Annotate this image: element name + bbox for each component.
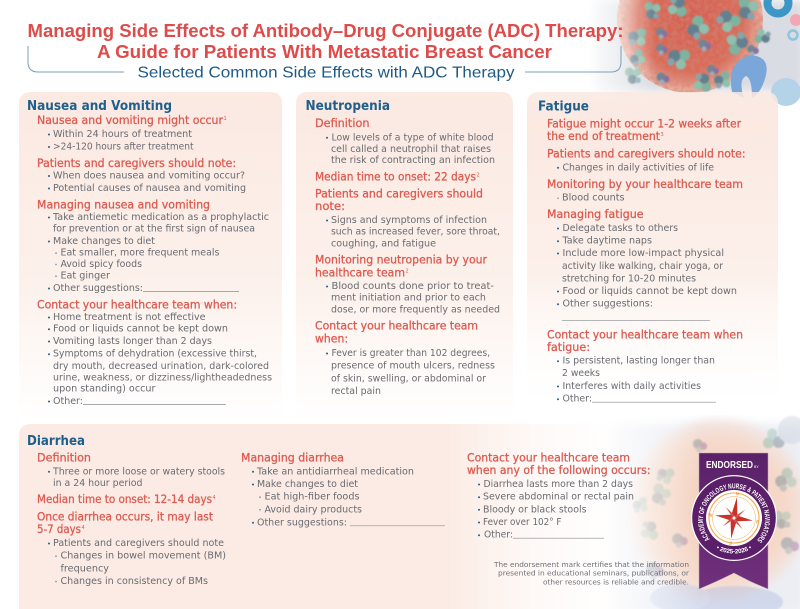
section: patients and caregivers: Patients and caregivers should [315, 188, 483, 201]
column: managing diarrhea: Take an antidiarrheal medication [256, 466, 414, 477]
subtitle with bracket: Selected Common Side Effects with ADC Therapy [138, 64, 515, 82]
section: might occur [547, 117, 741, 143]
section: patients and caregivers: Changes in daily activities of life [562, 162, 714, 173]
column: definition and duration: Definition [37, 451, 91, 464]
column: definition and duration: 5-7 days [37, 523, 81, 536]
badge: endorsed ribbon [691, 452, 777, 590]
heading: nausea and vomiting: Nausea and Vomiting [27, 98, 172, 114]
section: managing nausea: Other suggestions: [53, 283, 143, 294]
section: contact healthcare team: Symptoms of dehydration (excessive thirst, [53, 349, 257, 360]
endorsement note [493, 561, 689, 586]
section: managing nausea: Managing nausea and vomiting [37, 199, 210, 212]
section: contact healthcare team: Other: [53, 396, 83, 407]
section: managing fatigue: stretching for 10-20 minutes [562, 273, 696, 284]
median time to onset: 2 [476, 172, 480, 178]
badge: endorsed ribbon: ACADEMY OF ONCOLOGY NURSE & PATIENT NAVIGATORS [698, 483, 770, 543]
section: managing fatigue [547, 208, 737, 321]
endorsement note: The endorsement mark certifies that the information [493, 561, 689, 569]
section: contact healthcare team: Interferes with daily activities [562, 381, 701, 392]
icon: compass star [704, 488, 763, 549]
section: managing nausea: Eat ginger [60, 271, 111, 282]
icon: compass star: W [708, 512, 713, 518]
column: definition and duration [37, 451, 226, 587]
column: managing diarrhea [241, 451, 445, 528]
section: contact healthcare team: Is persistent, lasting longer than [562, 356, 715, 367]
column: contact healthcare team: Diarrhea lasts more than 2 days [484, 479, 633, 490]
section: contact healthcare team: urine, weakness, or dizziness/lightheadedness [53, 373, 272, 384]
background image: virus top right [590, 0, 800, 106]
section: patients and caregivers: When does nausea and vomiting occur? [53, 170, 245, 182]
section: contact healthcare team: fatigue: [547, 341, 590, 354]
column: definition and duration: Median time to onset: 12-14 days [37, 493, 212, 506]
column: managing diarrhea: Avoid dairy products [264, 504, 362, 515]
section: managing nausea [37, 199, 269, 294]
column: contact healthcare team: Other: [484, 530, 513, 541]
section: patients and caregivers: note: [315, 200, 345, 213]
title: A Guide for Patients With Metastatic Breast Cancer [97, 41, 552, 62]
section: managing fatigue: Managing fatigue [547, 208, 644, 221]
column: definition and duration: Once diarrhea occurs, it may last [37, 510, 214, 523]
section: contact healthcare team: Fever is greater than 102 degrees, [332, 348, 490, 359]
section: monitoring neutropenia: Monitoring neutropenia by your [315, 254, 487, 267]
section: monitoring neutropenia: Blood counts done prior to treat- [332, 281, 494, 292]
section: patients and caregivers [315, 188, 500, 249]
panel: neutropenia [296, 92, 513, 420]
column: contact healthcare team: Severe abdominal or rectal pain [483, 492, 634, 503]
section: definition: cell called a neutrophil that raises [331, 144, 491, 155]
heading: fatigue: Fatigue [538, 99, 589, 115]
median time to onset: Median time to onset: 22 days [315, 170, 476, 183]
section: managing nausea: Take antiemetic medication as a prophylactic [52, 212, 269, 223]
column: definition and duration: 4 [212, 495, 216, 501]
section: managing nausea: Avoid spicy foods [60, 259, 142, 270]
section: patients and caregivers: Signs and symptoms of infection [331, 215, 487, 226]
section: monitoring neutropenia: healthcare team [315, 266, 405, 279]
heading: diarrhea: Diarrhea [27, 433, 85, 449]
section: contact healthcare team: Contact your healthcare team when: [37, 299, 237, 312]
column: contact healthcare team: Bloody or black stools [483, 504, 586, 515]
title [28, 20, 624, 62]
section: patients and caregivers: coughing, and fatigue [331, 238, 436, 249]
section: might occur: 3 [660, 132, 664, 138]
column: contact healthcare team: when any of the following occurs: [467, 464, 650, 477]
section: managing nausea: Eat smaller, more frequent meals [60, 248, 220, 259]
column: managing diarrhea: Other suggestions: [257, 517, 347, 528]
section: definition: Definition [315, 117, 370, 130]
section: monitoring neutropenia [315, 254, 500, 315]
column: definition and duration: Changes in bowel movement (BM) [60, 551, 226, 562]
column: contact healthcare team [467, 451, 650, 541]
section: might occur [37, 114, 227, 153]
section: contact healthcare team: presence of mouth ulcers, redness [331, 361, 495, 372]
endorsement note: other resources is reliable and credible. [543, 578, 689, 586]
subtitle with bracket [28, 46, 621, 82]
endorsement note: presented in educational seminars, publications, or [498, 570, 689, 578]
section: patients and caregivers: such as increased fever, sore throat, [331, 227, 500, 238]
section: might occur: Within 24 hours of treatment [53, 129, 192, 140]
section: might occur: the end of treatment [547, 130, 661, 143]
badge: endorsed ribbon: BY [754, 465, 759, 469]
heading: neutropenia: Neutropenia [306, 98, 390, 114]
background image: faded virus bottom right [610, 416, 800, 609]
section: monitoring neutropenia: ment initiation and prior to each [331, 293, 486, 304]
section: contact healthcare team: Vomiting lasts longer than 2 days [53, 336, 212, 347]
column: managing diarrhea: Eat high-fiber foods [264, 492, 360, 503]
column: contact healthcare team: Fever over 102° F [483, 517, 562, 528]
section: contact healthcare team: Home treatment is not effective [53, 312, 206, 323]
icon: compass star: N [735, 491, 739, 496]
section: patients and caregivers: Potential causes of nausea and vomiting [53, 183, 246, 194]
column: definition and duration: Three or more loose or watery stools [52, 466, 225, 477]
column: definition and duration: frequency [60, 563, 109, 574]
section: managing fatigue: Delegate tasks to others [562, 223, 678, 234]
badge: endorsed ribbon: • 2025-2026 • [717, 546, 751, 554]
badge: endorsed ribbon: ENDORSED [706, 459, 753, 471]
section: patients and caregivers: Patients and caregivers should note: [37, 157, 236, 170]
section: contact healthcare team [315, 319, 495, 397]
section: contact healthcare team: 2 weeks [562, 368, 600, 379]
section: monitoring: Monitoring by your healthcare team [547, 178, 743, 191]
section: managing fatigue: Include more low-impact physical [562, 248, 724, 259]
section: might occur: 1 [224, 116, 227, 122]
section: monitoring: Blood counts [562, 193, 624, 204]
column: managing diarrhea: Managing diarrhea [241, 451, 344, 464]
section: managing fatigue: activity like walking, chair yoga, or [562, 261, 724, 272]
section: patients and caregivers [547, 147, 746, 173]
section: monitoring neutropenia: dose, or more frequently as needed [331, 304, 500, 315]
panel: fatigue [527, 92, 778, 420]
section: contact healthcare team: dry mouth, decreased urination, dark-colored [53, 361, 269, 372]
column: managing diarrhea: Make changes to diet [257, 479, 358, 490]
section: contact healthcare team [37, 299, 272, 407]
section: contact healthcare team: Other: [562, 394, 592, 405]
section: managing fatigue: Food or liquids cannot be kept down [562, 286, 737, 297]
section: contact healthcare team: Food or liquids cannot be kept down [53, 324, 228, 335]
column: definition and duration: in a 24 hour period [53, 478, 142, 489]
section: contact healthcare team [547, 328, 743, 405]
column: contact healthcare team: Contact your healthcare team [467, 451, 630, 464]
section: might occur: Fatigue might occur 1-2 weeks after [547, 117, 741, 130]
section: managing fatigue: Other suggestions: [562, 299, 653, 310]
section: definition: Low levels of a type of white blood [332, 132, 494, 143]
section: monitoring [547, 178, 743, 204]
section: contact healthcare team: rectal pain [331, 386, 381, 397]
panel: diarrhea [19, 424, 650, 609]
blue antibody shapes [731, 0, 800, 106]
icon: compass star: E [756, 519, 760, 525]
section: might occur: Nausea and vomiting might occur [37, 114, 223, 127]
section: contact healthcare team: Contact your healthcare team [315, 319, 478, 332]
section: definition: the risk of contracting an infection [331, 155, 495, 166]
panel: nausea and vomiting [19, 92, 282, 420]
section: definition [315, 117, 495, 166]
section: contact healthcare team: of skin, swelling, or abdominal or [331, 373, 487, 384]
icon: compass star: S [729, 541, 732, 546]
section: monitoring neutropenia: 2 [406, 268, 409, 274]
section: contact healthcare team: Contact your healthcare team when [547, 328, 743, 341]
section: patients and caregivers [37, 157, 246, 194]
column: definition and duration: Changes in consistency of BMs [60, 576, 208, 587]
section: managing nausea: for prevention or at the first sign of nausea [53, 223, 255, 234]
section: contact healthcare team: when: [315, 332, 348, 345]
section: managing fatigue: Take daytime naps [562, 236, 652, 247]
column: definition and duration: 4 [82, 525, 85, 531]
section: might occur: >24-120 hours after treatment [53, 142, 194, 153]
section: contact healthcare team: upon standing) occur [53, 384, 156, 395]
column: definition and duration: Patients and caregivers should note [53, 538, 224, 549]
title: Managing Side Effects of Antibody–Drug Conjugate (ADC) Therapy: [28, 20, 624, 41]
section: managing nausea: Make changes to diet [53, 236, 155, 247]
section: patients and caregivers: Patients and caregivers should note: [547, 147, 746, 160]
